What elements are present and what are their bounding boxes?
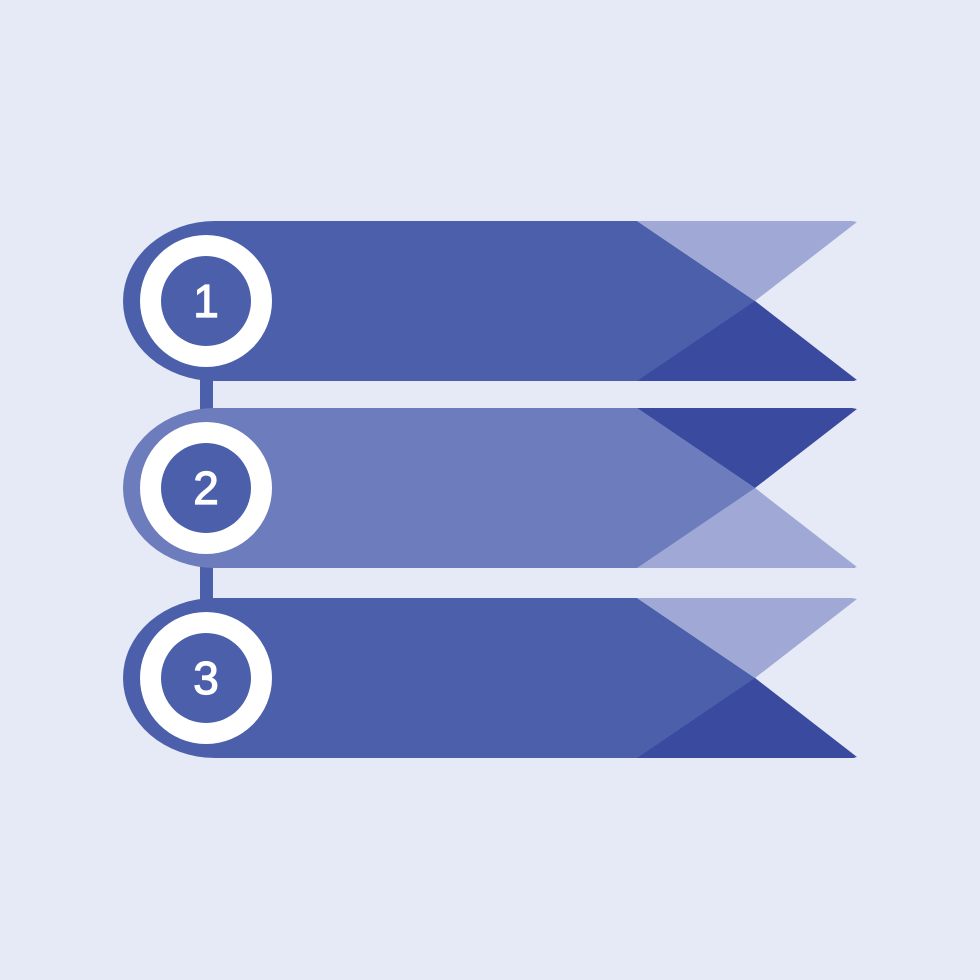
badge 1 [140, 235, 272, 367]
connector line [200, 370, 213, 610]
banner 3 [123, 598, 857, 758]
badge 3 [140, 612, 272, 744]
banner 1 [123, 221, 857, 381]
badge 2: 2 [193, 462, 219, 514]
badge 2 [140, 422, 272, 554]
banner 2 [123, 408, 857, 568]
badge 1: 1 [193, 275, 219, 327]
badge 3: 3 [193, 652, 219, 704]
